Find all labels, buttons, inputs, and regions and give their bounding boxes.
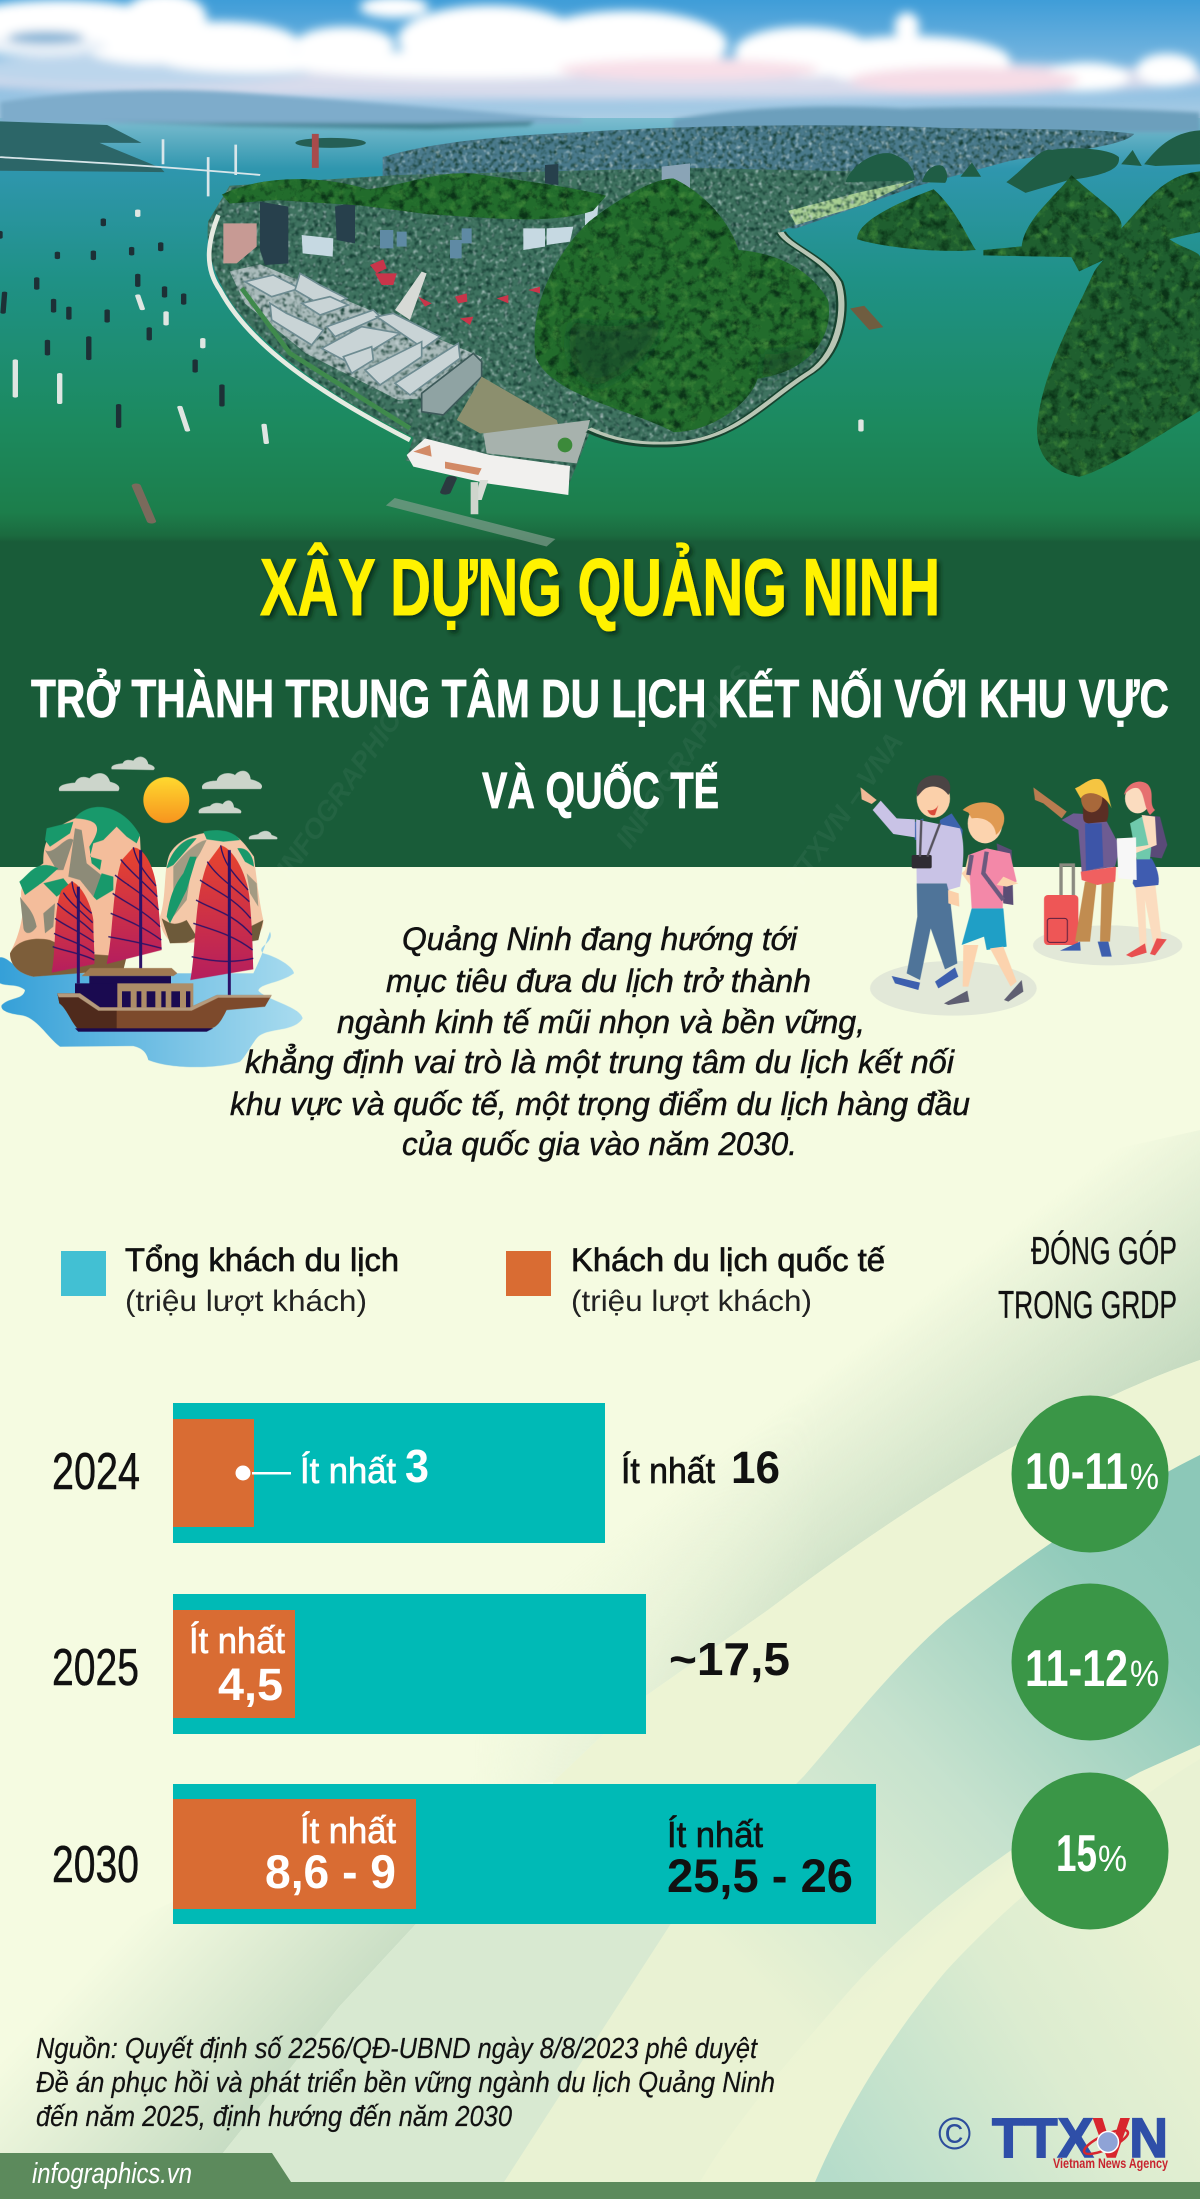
legend: total tourists: Tổng khách du lịch (125, 1242, 399, 1278)
icon: boy with backpack (944, 802, 1023, 1005)
intro paragraph: của quốc gia vào năm 2030. (402, 1126, 797, 1162)
source note (36, 2033, 775, 2133)
bar chart row 2025 (52, 1594, 790, 1734)
bar chart row 2024: Ít nhất (621, 1450, 715, 1491)
footer band with site tab (0, 2153, 1200, 2199)
bar chart row 2030 (52, 1784, 876, 1924)
icon: clouds (59, 757, 277, 839)
TTXVN logo: Vietnam News Agency (1053, 2155, 1168, 2171)
GRDP circle 2030: % (1098, 1838, 1127, 1879)
GRDP circle 2024 (1012, 1396, 1168, 1552)
bar chart row 2030: 25,5 - 26 (667, 1849, 853, 1902)
bar chart row 2024: 2024 (52, 1443, 140, 1501)
intro paragraph (230, 921, 970, 1162)
bar chart row 2024 (52, 1403, 780, 1543)
GRDP circle 2025: 11-12 (1025, 1640, 1128, 1698)
column heading: GRDP contribution (998, 1230, 1177, 1327)
distant mountains (0, 90, 582, 123)
plaza and quay (407, 438, 570, 495)
bar chart row 2025: 4,5 (218, 1659, 283, 1710)
illustration: junk boat, limestone karsts, sun and clouds (0, 757, 303, 1067)
red roofs (370, 259, 540, 325)
header green band (0, 0, 1200, 867)
legend: international tourists (506, 1242, 885, 1318)
icon: sail battens and masts (53, 845, 253, 995)
icon: left karst (10, 807, 143, 977)
GRDP circle 2024: 10-11 (1025, 1443, 1128, 1501)
peninsula city (208, 168, 915, 491)
far right limestone islands (846, 130, 1200, 193)
icon: man with camera (861, 775, 963, 990)
intro paragraph: ngành kinh tế mũi nhọn và bền vững, (337, 1004, 865, 1040)
forested limestone hills (222, 171, 1200, 477)
ground shadows (870, 925, 1182, 1016)
bar chart row 2024: Ít nhất (300, 1450, 396, 1491)
boats on the bay (0, 211, 861, 521)
subtitle (31, 668, 1169, 819)
icon: sun (143, 777, 189, 823)
legend: international tourists: Khách du lịch quốc tế (571, 1242, 885, 1278)
bar chart row 2024: 3 (405, 1440, 429, 1492)
villa blocks (245, 273, 460, 395)
watermarks: TTXVN – VNA (780, 727, 909, 893)
source note: Nguồn: Quyết định số 2256/QĐ-UBND ngày 8/8/2023 phê duyệt (36, 2033, 759, 2065)
GRDP circle 2030: 15 (1056, 1825, 1097, 1883)
intro paragraph: khu vực và quốc tế, một trọng điểm du lịch hàng đầu (230, 1086, 970, 1122)
far left shore (0, 121, 165, 172)
bar chart row 2025: 2025 (52, 1639, 139, 1697)
hero aerial photo of Ha Long city and bay (0, 0, 1200, 543)
sky with clouds (0, 0, 1200, 130)
bar chart row 2030: 2030 (52, 1836, 139, 1894)
construction site and road (457, 377, 560, 433)
illustration: tourists (861, 775, 1182, 1016)
bar chart row 2024: 16 (731, 1442, 780, 1493)
bar chart row 2030: Ít nhất (300, 1810, 396, 1851)
watermarks (270, 660, 909, 893)
bar chart row 2030: 8,6 - 9 (265, 1845, 396, 1898)
subtitle: VÀ QUỐC TẾ (482, 761, 719, 819)
icon: woman with hat and suitcase (1033, 779, 1120, 957)
icon: right karst (160, 830, 263, 943)
watermarks: INFOGRAPHICS (270, 690, 418, 883)
GRDP circle 2025 (1012, 1584, 1168, 1740)
icon: ship hull and cabin (57, 968, 272, 1032)
footer band with site tab: infographics.vn (32, 2158, 192, 2190)
coastal road and pier (390, 232, 876, 543)
watermarks: INFOGRAPHICS (610, 660, 758, 853)
left bridge and ferris wheel (0, 157, 260, 175)
GRDP circle 2030 (1012, 1772, 1168, 1930)
far city (383, 125, 1134, 229)
intro paragraph: mục tiêu đưa du lịch trở thành (386, 963, 811, 999)
icon: red sails (52, 845, 253, 980)
legend: international tourists: (triệu lượt khách) (571, 1285, 812, 1318)
TTXVN logo: © (938, 2108, 971, 2159)
legend: total tourists (61, 1242, 399, 1318)
icon: woman with map (1117, 782, 1167, 957)
legend: total tourists: (triệu lượt khách) (125, 1285, 367, 1318)
intro paragraph: Quảng Ninh đang hướng tới (402, 921, 798, 957)
shore promenade (209, 215, 410, 440)
towers and high-rises (260, 163, 690, 265)
TTXVN logo: TTXVN (992, 2106, 1168, 2169)
long seaside building (422, 353, 482, 415)
bar chart row 2025: Ít nhất (189, 1620, 285, 1661)
GRDP circle 2025: % (1130, 1653, 1159, 1694)
source note: đến năm 2025, định hướng đến năm 2030 (36, 2101, 512, 2133)
city features: towers, villas, plaza, shoreline (209, 163, 690, 500)
intro paragraph: khẳng định vai trò là một trung tâm du lịch kết nối (245, 1044, 955, 1080)
bar chart row 2025: ~17,5 (669, 1633, 790, 1685)
source note: Đề án phục hồi và phát triển bền vững ngành du lịch Quảng Ninh (36, 2067, 775, 2099)
GRDP circle 2024: % (1130, 1456, 1159, 1497)
dark rock face (570, 318, 811, 386)
icon: sea (0, 932, 303, 1067)
water (0, 118, 1200, 542)
background with diagonal swooshes (0, 1130, 1200, 2182)
bar chart row 2030: Ít nhất (667, 1814, 763, 1855)
